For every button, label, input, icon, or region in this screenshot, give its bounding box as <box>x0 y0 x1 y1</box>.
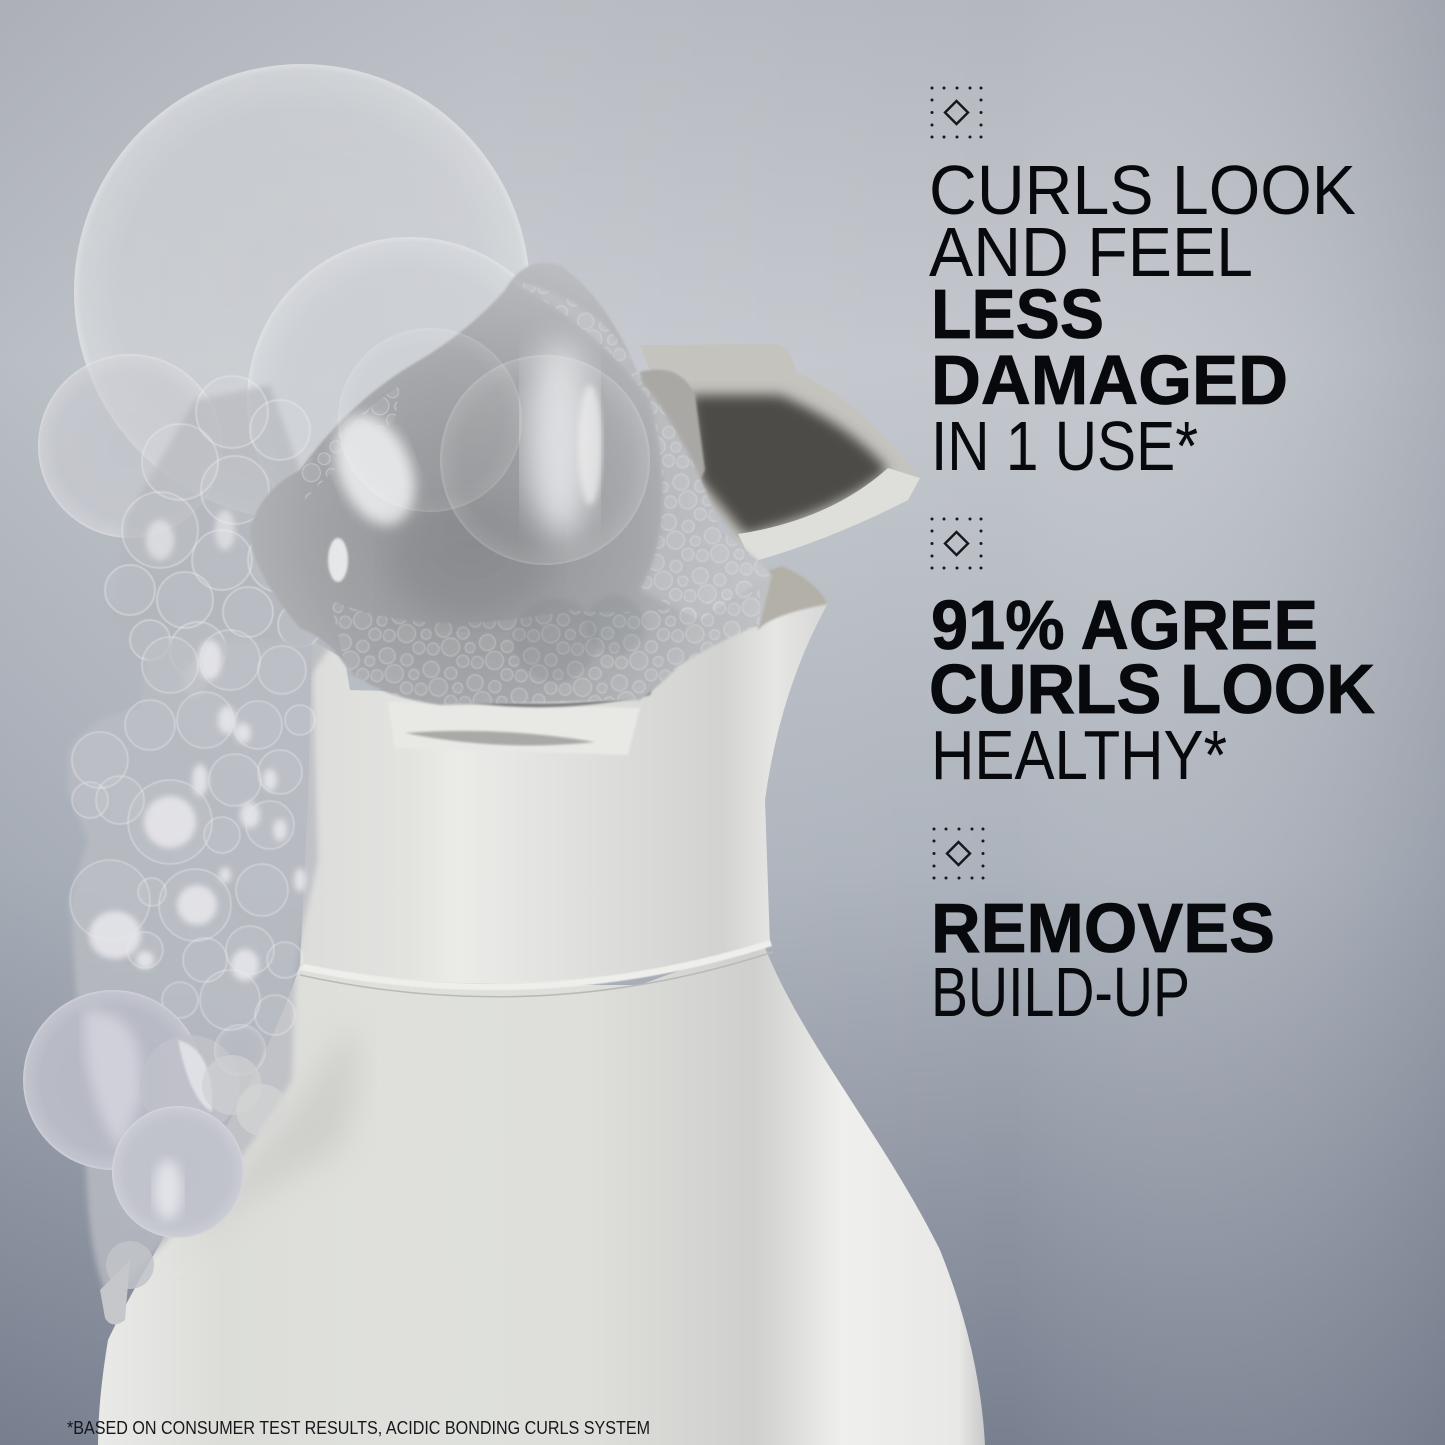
heading: 91% agree: CURLS LOOK <box>929 650 1375 728</box>
heading: less damaged: IN 1 USE* <box>931 407 1198 485</box>
foam: dripping column <box>68 630 318 1300</box>
foam lattice left of spout <box>105 376 335 698</box>
shadow on bottle body <box>170 1020 358 1260</box>
icon: diamond in dotted square 1 <box>930 86 982 138</box>
heading: removes build-up: REMOVES <box>931 889 1275 967</box>
heading: removes build-up <box>931 889 1275 1031</box>
heading: less damaged <box>929 151 1356 485</box>
foam: large bubbles lower left <box>23 990 288 1325</box>
heading: 91% agree <box>929 586 1375 794</box>
large soap bubble top <box>74 64 530 520</box>
heading: removes build-up: BUILD-UP <box>931 953 1190 1031</box>
heading: less damaged: DAMAGED <box>931 341 1288 419</box>
flip cap of bottle <box>640 344 920 562</box>
bottle body <box>98 940 985 1445</box>
foam: upper bubbles <box>38 237 573 563</box>
bottle neck and spout <box>300 566 828 997</box>
heading: 91% agree: HEALTHY* <box>931 716 1227 794</box>
footnote: *BASED ON CONSUMER TEST RESULTS, ACIDIC BONDING CURLS SYSTEM <box>67 1417 650 1438</box>
heading: less damaged: AND FEEL <box>929 213 1253 291</box>
icon: diamond in dotted square 2 <box>930 518 982 570</box>
icon: diamond in dotted square 3 <box>932 828 984 880</box>
heading: 91% agree: 91% AGREE <box>931 586 1318 664</box>
foam mass in spout <box>250 263 772 705</box>
heading: less damaged: CURLS LOOK <box>929 151 1356 229</box>
heading: less damaged: LESS <box>931 275 1104 353</box>
